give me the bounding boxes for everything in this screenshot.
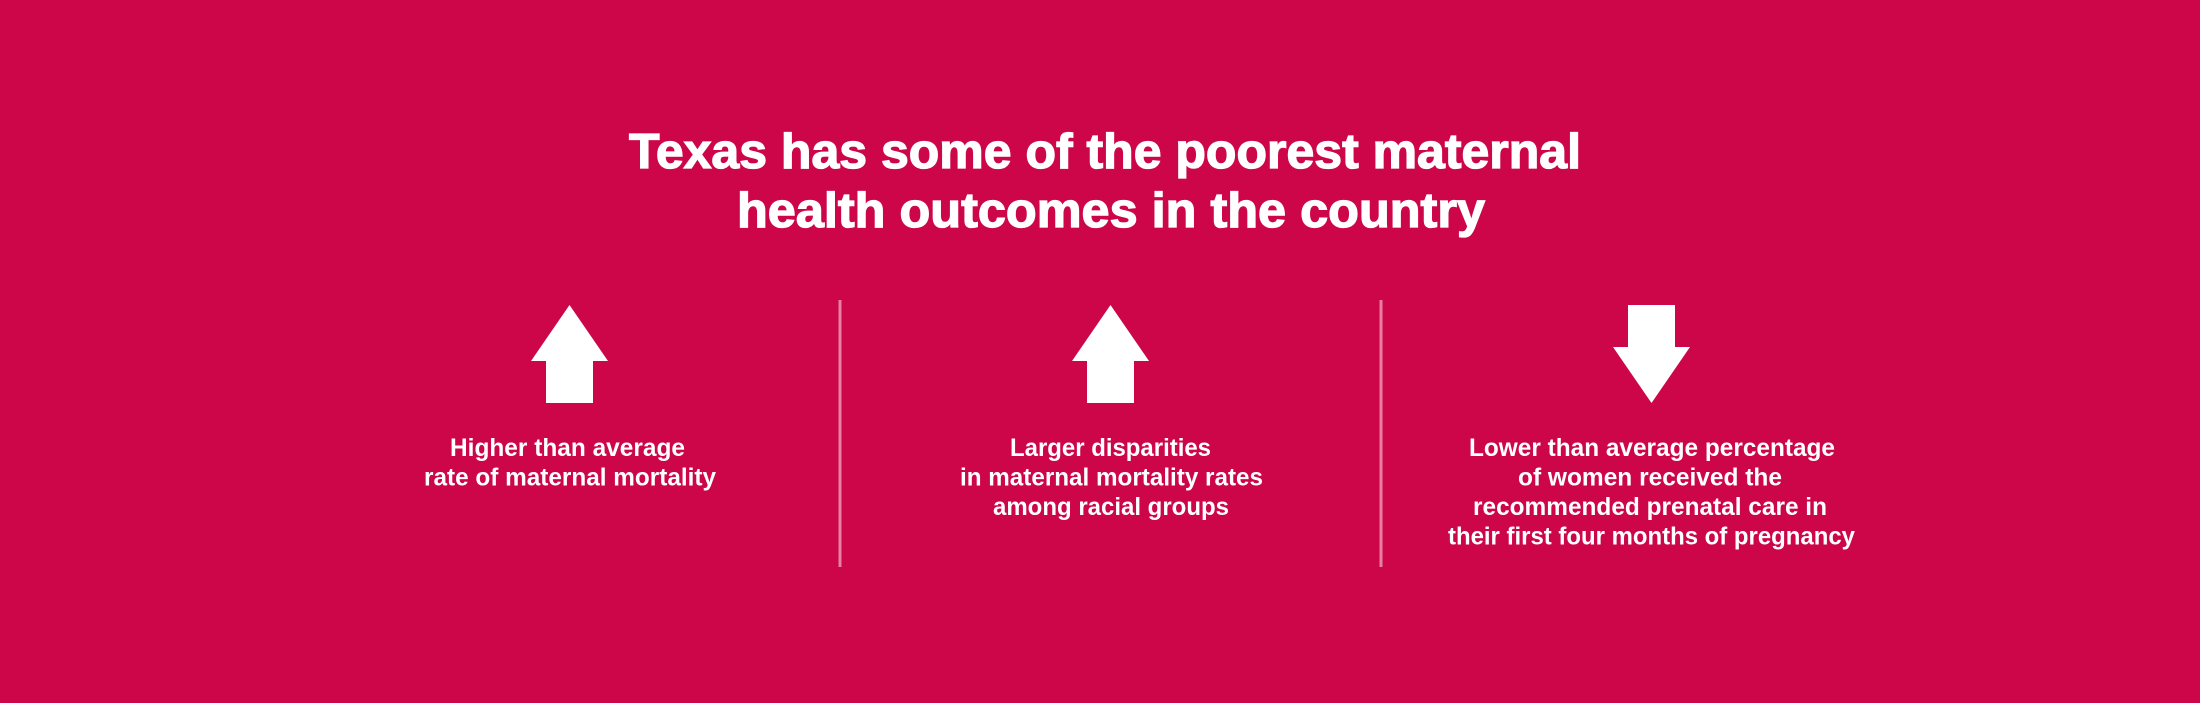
panel: lower prenatal care (1448, 305, 1855, 550)
title: health outcomes in the country (737, 184, 1485, 238)
text: lower than average percentage: of women received the (1518, 464, 1782, 492)
text: larger disparities (960, 434, 1263, 521)
title (629, 125, 1581, 238)
text: lower than average percentage (1448, 434, 1855, 550)
title: Texas has some of the poorest maternal (629, 125, 1581, 179)
text: larger disparities: Larger disparities (1010, 434, 1211, 462)
text: lower than average percentage: their first four months of pregnancy (1448, 522, 1855, 550)
text: higher than average rate: rate of maternal mortality (424, 464, 716, 492)
icon: down arrow (1613, 305, 1690, 403)
text: larger disparities: among racial groups (993, 493, 1229, 521)
text: larger disparities: in maternal mortality rates (960, 464, 1263, 492)
icon: up arrow (531, 305, 608, 403)
text: lower than average percentage: Lower than average percentage (1469, 434, 1835, 462)
icon: up arrow (1072, 305, 1149, 403)
text: higher than average rate: Higher than average (450, 434, 685, 462)
text: higher than average rate (424, 434, 716, 492)
text: lower than average percentage: recommended prenatal care in (1473, 493, 1827, 521)
panel: larger racial disparities (960, 305, 1263, 521)
panel: higher mortality rate (424, 305, 716, 492)
